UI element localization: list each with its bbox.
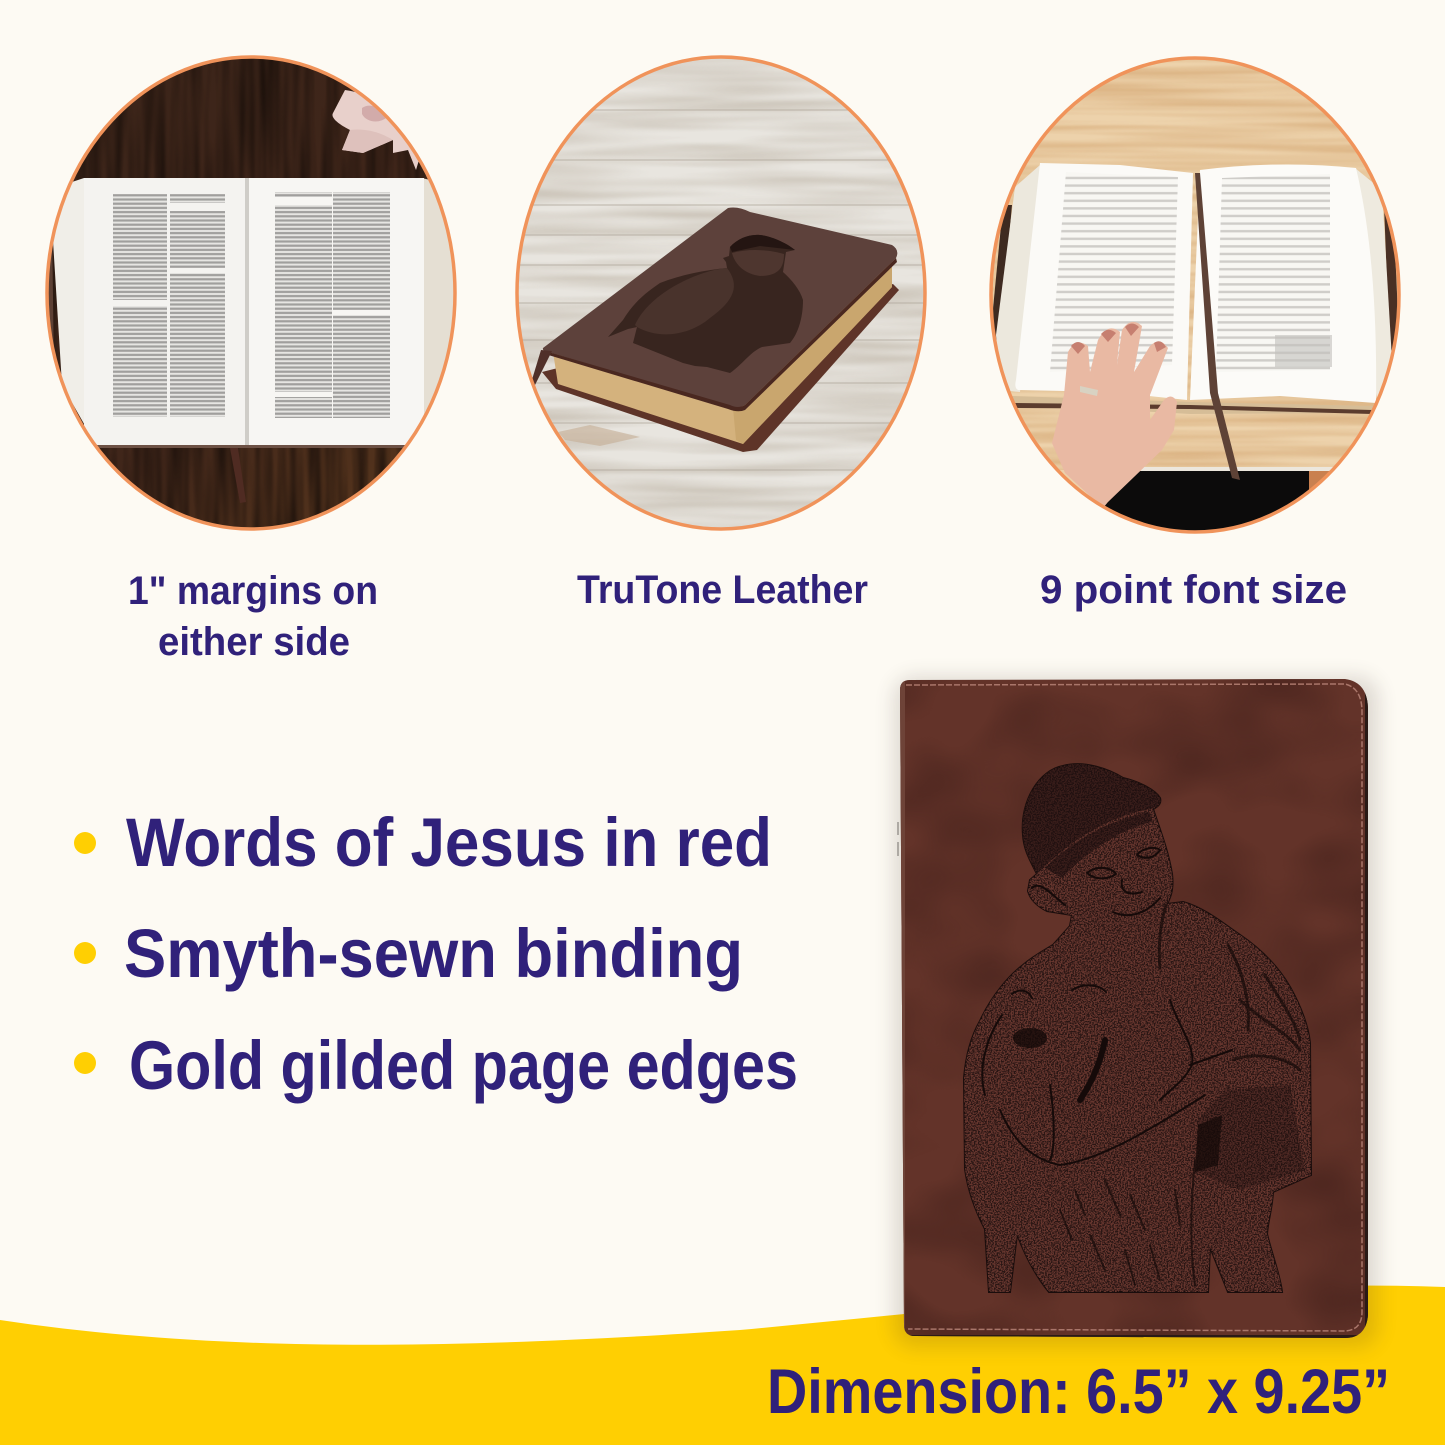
engraved portrait: [608, 235, 803, 373]
text columns: [113, 192, 390, 418]
spine detail: [897, 822, 899, 856]
large leather bible cover: [895, 675, 1375, 1345]
caption: font size: 9 point font size: [1040, 568, 1347, 612]
boy hair fringe: [1045, 812, 1152, 878]
icon: pink rose: [332, 90, 425, 170]
panel: hand on open bible: [985, 50, 1405, 541]
open book pages: [40, 178, 456, 503]
caption: margins: 1" margins on: [128, 569, 378, 613]
boy cap: [1023, 764, 1160, 874]
open book pages: [990, 163, 1400, 480]
circle outline: [47, 57, 455, 529]
circle outline: [517, 57, 925, 529]
dog nose: [1013, 1028, 1047, 1048]
feature: binding: Smyth-sewn binding: [124, 915, 743, 992]
panel: leather bible on white wood: [510, 50, 940, 540]
boy shirt folds: [1159, 905, 1300, 1070]
panel: open bible on dark wood: [40, 50, 460, 540]
book with gilded pages: [531, 208, 899, 452]
dog features: [982, 985, 1232, 1165]
circle outline: [991, 58, 1399, 532]
bullet 2: [74, 942, 96, 964]
bookmark ribbon: [1195, 173, 1240, 480]
engraved portrait of boy and dog: [898, 764, 1311, 1292]
caption: margins: either side: [158, 620, 350, 664]
book shadow: [894, 677, 1378, 1347]
yellow wave band: [0, 1285, 1445, 1445]
plank seams: [510, 110, 940, 470]
dog fur strokes: [1060, 1160, 1195, 1285]
boy face features: [1032, 848, 1160, 915]
boy shorts shadow: [1195, 1085, 1305, 1190]
feature: red letter: Words of Jesus in red: [126, 804, 772, 881]
bullet 3: [74, 1052, 96, 1074]
icon: hand: [1052, 322, 1177, 508]
feature list: [74, 804, 798, 1104]
caption: leather: TruTone Leather: [577, 568, 868, 612]
feature: page edges: Gold gilded page edges: [129, 1027, 798, 1104]
caption: margins: [128, 569, 378, 664]
bullet 1: [74, 832, 96, 854]
